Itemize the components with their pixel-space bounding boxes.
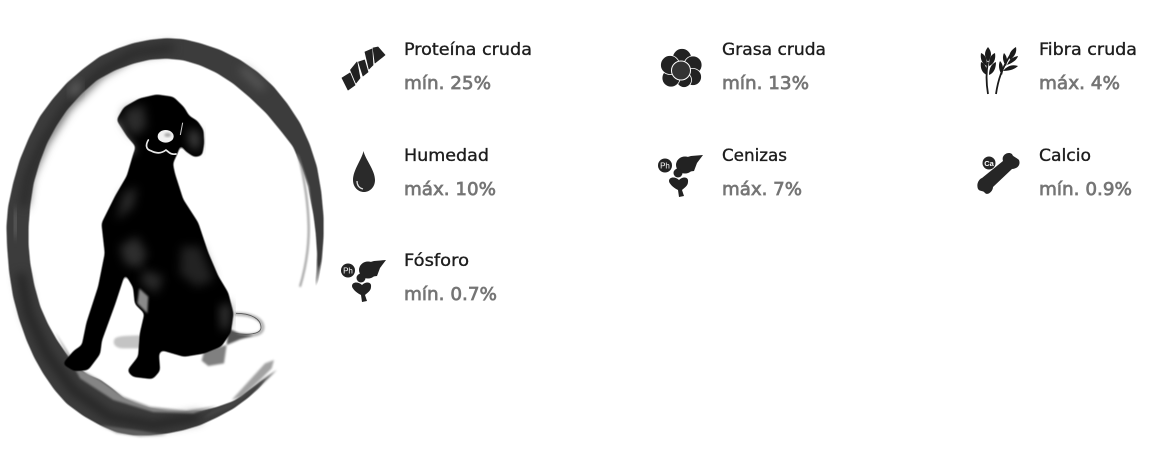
icon: wheat <box>981 47 1018 94</box>
item: Fósforo <box>341 251 497 305</box>
item: Calcio <box>977 146 1132 200</box>
gray wash patches <box>120 237 147 268</box>
item: Cenizas <box>658 146 802 200</box>
value: máx. 7% <box>722 179 802 200</box>
icon: bone Ca: Ca <box>984 159 995 168</box>
label: Humedad <box>404 146 489 165</box>
light inner band at lower left <box>55 332 217 413</box>
label: Fósforo <box>404 251 469 270</box>
nose <box>158 130 174 143</box>
value: mín. 0.9% <box>1039 179 1132 200</box>
sliver on right side <box>297 152 314 287</box>
item: Fibra cruda <box>981 40 1137 94</box>
brush ring <box>7 38 323 437</box>
muzzle outline <box>147 140 176 154</box>
value: máx. 4% <box>1039 73 1120 94</box>
body <box>63 95 233 379</box>
tail <box>232 314 263 335</box>
icon: minerals Ph <box>341 260 386 302</box>
value: mín. 0.7% <box>404 284 497 305</box>
light brush tail at bottom right <box>232 360 274 400</box>
dog silhouette <box>63 95 263 379</box>
label: Grasa cruda <box>722 40 826 59</box>
value: máx. 10% <box>404 179 496 200</box>
label: Calcio <box>1039 146 1091 165</box>
item: Grasa cruda <box>660 40 826 94</box>
ring tonal washes <box>23 47 173 207</box>
illustration: dog inside brush ring <box>7 38 323 437</box>
fuzzy left of head <box>113 117 135 152</box>
label: Fibra cruda <box>1039 40 1137 59</box>
icon: minerals Ph <box>658 155 703 197</box>
icon: fat cells <box>660 48 702 88</box>
item: Humedad <box>353 146 496 200</box>
icon: minerals Ph: Ph <box>660 162 670 170</box>
icon: protein <box>342 47 385 90</box>
value: mín. 13% <box>722 73 809 94</box>
icon: bone Ca <box>977 153 1020 194</box>
item: Proteína cruda <box>342 40 532 94</box>
outer gray edge lower left <box>100 425 167 437</box>
icon: water drop <box>353 151 375 192</box>
icon: minerals Ph: Ph <box>343 266 353 276</box>
value: mín. 25% <box>404 73 491 94</box>
label: Cenizas <box>722 146 787 165</box>
label: Proteína cruda <box>404 40 532 59</box>
ground shadow <box>114 335 143 348</box>
rear paw <box>202 345 227 366</box>
